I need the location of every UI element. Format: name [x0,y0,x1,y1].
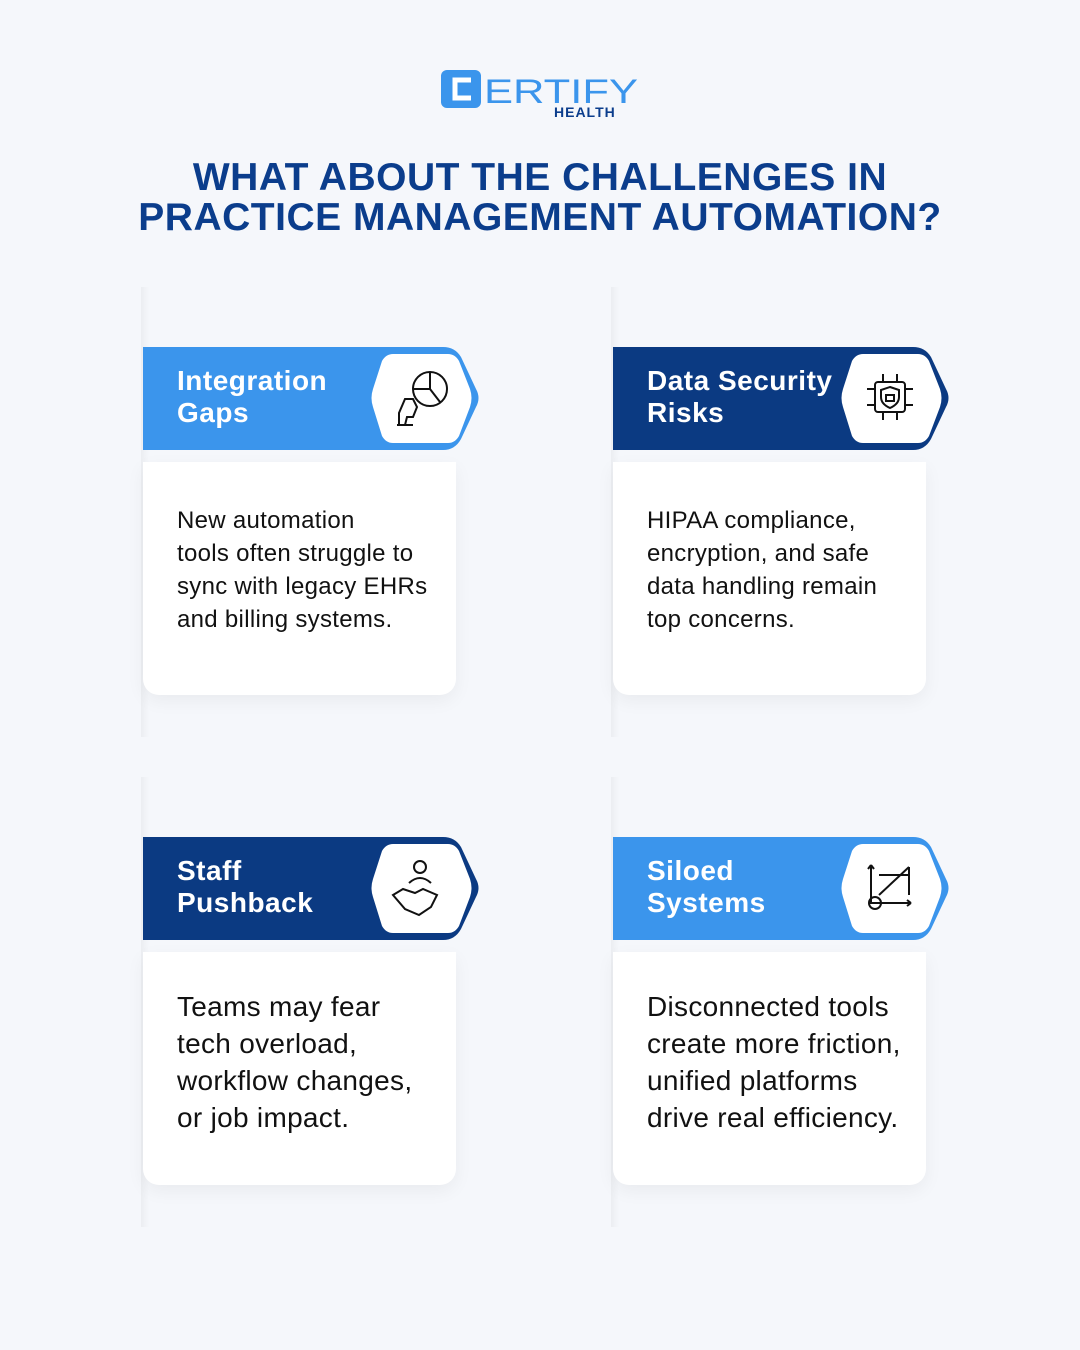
title: WHAT ABOUT THE CHALLENGES IN [193,156,887,199]
header band: Data Security [647,365,832,396]
body text: Disconnected tools [647,991,889,1022]
panel: siloed systems [611,777,948,1227]
header band [143,347,478,450]
header band: Systems [647,887,766,918]
header band: Integration [177,365,327,396]
body text: and billing systems. [177,606,392,633]
header band [613,347,948,450]
title [138,156,942,239]
body text: drive real efficiency. [647,1102,898,1133]
body text: tech overload, [177,1028,357,1059]
body text: HIPAA compliance, [647,507,856,534]
header band [143,837,478,940]
icon: shield chip [867,374,913,420]
logo: HEALTH [554,104,616,120]
header band: Staff [177,855,242,886]
header band: Pushback [177,887,313,918]
body text: unified platforms [647,1065,858,1096]
body text: encryption, and safe [647,540,869,567]
body text: Teams may fear [177,991,380,1022]
panel: data security risks [611,287,948,737]
body text [613,462,926,695]
header band: Gaps [177,397,249,428]
icon: handshake [393,861,437,915]
body text: sync with legacy EHRs [177,573,427,600]
body text: data handling remain [647,573,877,600]
header band: Siloed [647,855,734,886]
logo: ERTIFY [484,73,638,111]
panel: staff pushback [141,777,478,1227]
body text: workflow changes, [177,1065,412,1096]
header band: Risks [647,397,724,428]
body text [143,952,456,1185]
icon: puzzle [397,372,447,425]
logo [441,70,638,120]
body text [613,952,926,1185]
body text: or job impact. [177,1102,349,1133]
body text: tools often struggle to [177,540,413,567]
icon: gear diagram [868,865,911,909]
header band [613,837,948,940]
body text: New automation [177,507,355,534]
body text [143,462,456,695]
body text: top concerns. [647,606,795,633]
title: PRACTICE MANAGEMENT AUTOMATION? [138,196,942,239]
panel: integration gaps [141,287,478,737]
body text: create more friction, [647,1028,901,1059]
